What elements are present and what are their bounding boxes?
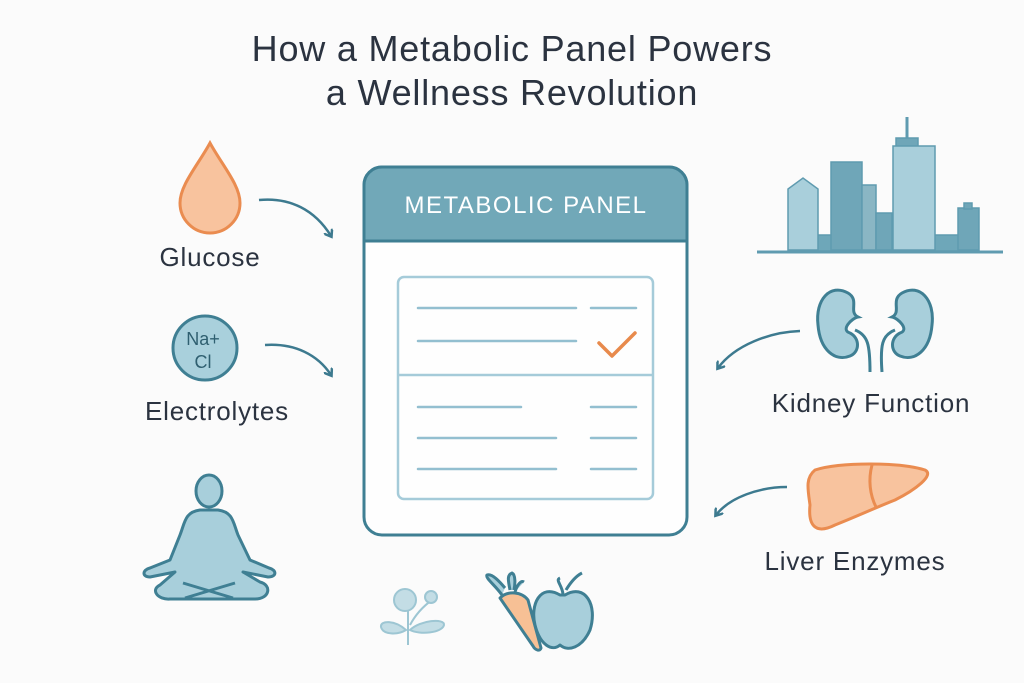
icon: city skyline	[757, 117, 1003, 252]
panel: metabolic panel: METABOLIC PANEL	[404, 192, 648, 219]
panel: metabolic panel	[364, 167, 687, 535]
icon: liver	[808, 464, 928, 529]
label: glucose: Glucose	[160, 242, 260, 272]
icon: electrolytes	[173, 316, 237, 380]
icon: electrolytes: Na+	[186, 329, 220, 349]
icon: sprout	[381, 589, 444, 645]
arrow: liver	[716, 487, 787, 515]
icon: kidneys	[818, 290, 932, 372]
arrow: glucose	[259, 200, 331, 236]
icon: check	[599, 333, 635, 356]
title	[252, 28, 772, 113]
icon: carrot and apple	[487, 573, 592, 650]
title: How a Metabolic Panel Powers	[252, 28, 772, 69]
arrow: kidney	[718, 331, 800, 368]
icon: glucose drop	[180, 143, 240, 233]
icon: electrolytes: Cl	[194, 352, 212, 372]
arrow: electrolytes	[265, 345, 331, 375]
label: liver enzymes: Liver Enzymes	[765, 546, 945, 576]
title: a Wellness Revolution	[326, 72, 698, 113]
label: electrolytes: Electrolytes	[145, 396, 289, 426]
label: kidney function: Kidney Function	[772, 388, 970, 418]
icon: meditation	[144, 475, 275, 599]
